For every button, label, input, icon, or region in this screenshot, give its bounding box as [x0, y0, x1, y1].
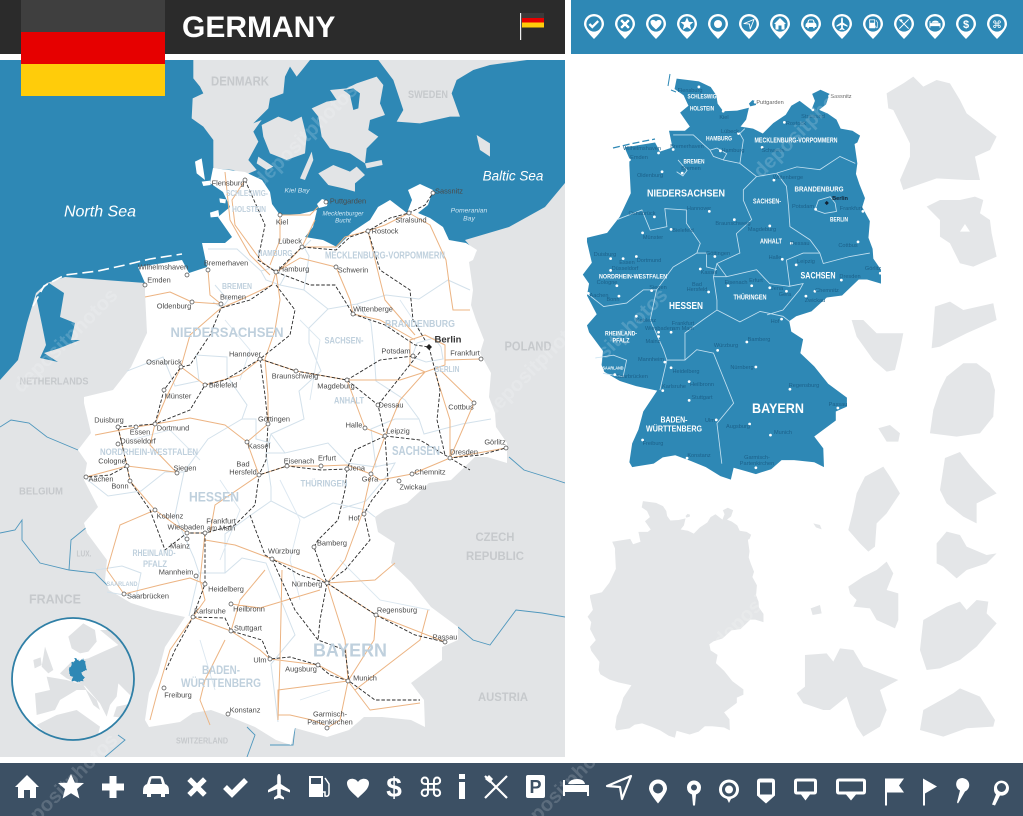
city labels: Karlsruhe [194, 606, 226, 616]
city names: Karlsruhe [662, 384, 686, 390]
federal state labels: SACHSEN- [324, 336, 364, 346]
road network [86, 172, 506, 728]
city labels: Flensburg [212, 178, 244, 188]
state names: BREMEN [684, 158, 705, 166]
city labels [88, 178, 506, 726]
city names: Mannheim [638, 357, 664, 363]
city labels: Leipzig [386, 426, 410, 436]
federal state labels: BRANDENBURG [385, 318, 455, 330]
neighbouring country labels: AUSTRIA [478, 692, 528, 704]
city names: Stralsund [801, 114, 825, 120]
city labels: Heidelberg [208, 584, 244, 594]
federal state labels: WÜRTTENBERG [181, 677, 261, 690]
city names: Stuttgart [691, 395, 713, 401]
city labels: Cottbus [448, 402, 474, 412]
federal state labels: SACHSEN [392, 444, 440, 458]
federal state labels: PFALZ [143, 559, 168, 569]
federal state labels: RHEINLAND- [132, 548, 176, 558]
railway network [86, 180, 506, 700]
state names: SCHLESWIG [688, 94, 716, 100]
city names: Munich [774, 430, 792, 436]
sea labels: Baltic Sea [483, 168, 544, 184]
gray state silhouettes, upper column [852, 77, 997, 442]
city names: Bremerhaven [670, 144, 704, 150]
neighbouring country labels: DENMARK [211, 74, 270, 88]
city names: Schwerin [761, 148, 785, 154]
neighbouring country labels: POLAND [504, 338, 552, 354]
neighbouring country labels: BELGIUM [19, 486, 63, 498]
city labels: Dessau [378, 400, 404, 410]
city names: Oldenburg [637, 173, 663, 179]
map pin icon row: $ [963, 19, 969, 31]
city names: Partenkirchen [740, 461, 774, 467]
city names: Ulm [705, 418, 715, 424]
city names: Hannover [687, 206, 711, 212]
city labels: Emden [147, 276, 171, 284]
city names: Siegen [649, 285, 667, 291]
blue administrative map of Germany [583, 74, 882, 480]
city labels: Bremerhaven [204, 258, 248, 268]
city names: Essen [619, 260, 635, 266]
city labels: Zwickau [399, 482, 427, 492]
sea labels: Bay [463, 216, 475, 222]
state names: HAMBURG [706, 136, 732, 142]
city names: Leipzig [797, 259, 815, 265]
city labels: Potsdam [381, 346, 411, 356]
stock watermarks: depositphotos [709, 539, 822, 652]
city labels: Mannheim [159, 568, 193, 576]
city labels: Regensburg [377, 606, 417, 614]
state names: HESSEN [669, 300, 703, 312]
bottom icon row: ⌘ [418, 773, 444, 804]
federal state labels: BREMEN [222, 281, 252, 291]
city labels: Münster [165, 392, 192, 400]
city names: Hamburg [721, 148, 745, 154]
city names: Kiel [719, 115, 729, 121]
city labels: Würzburg [268, 546, 300, 556]
city names: Cottbus [838, 243, 858, 249]
city names: Bielefeld [672, 228, 694, 234]
stock watermarks: depositphotos [559, 284, 672, 397]
city names: Augsburg [726, 424, 750, 430]
city labels: Oldenburg [157, 302, 191, 310]
city names: Wittenberge [773, 175, 803, 181]
city names: Saarbrücken [616, 374, 648, 380]
city names: Cologne [597, 280, 617, 286]
city names: Jena [771, 286, 784, 292]
small flag icon [520, 13, 544, 40]
city names: Osnabrück [628, 211, 656, 217]
city names [590, 88, 881, 467]
city labels: Berlin [435, 334, 462, 346]
state names [599, 94, 848, 434]
city labels: Jena [349, 464, 366, 472]
city labels: Görlitz [484, 438, 506, 446]
gray Germany silhouette [588, 501, 763, 738]
federal state labels: THÜRINGEN [300, 478, 348, 490]
federal state labels: MECKLENBURG-VORPOMMERN [325, 250, 445, 262]
city labels: Lübeck [278, 236, 302, 246]
city names: Aachen [590, 293, 608, 299]
city names: Halle [769, 255, 781, 261]
city labels: Aachen [88, 474, 114, 484]
city labels: Koblenz [157, 512, 184, 520]
state names: BRANDENBURG [794, 184, 844, 194]
city names: Bonn [606, 297, 620, 303]
city names: Nürnberg [730, 365, 754, 371]
city names: Frankfurt [672, 321, 695, 327]
city names: Bamberg [748, 337, 770, 343]
city names: Emden [630, 155, 648, 161]
city labels: Munich [353, 674, 377, 682]
inset locator globe [12, 618, 140, 740]
city labels: Stuttgart [234, 624, 262, 632]
city names: Berlin [832, 196, 849, 202]
title: GERMANY [182, 11, 335, 44]
state names: NORDRHEIN-WESTFALEN [599, 274, 667, 280]
state names: ANHALT [760, 238, 783, 246]
state names: PFALZ [612, 338, 630, 344]
neighbouring country labels: LUX. [76, 550, 92, 558]
city labels: Augsburg [285, 664, 317, 674]
city labels: Heilbronn [233, 604, 265, 614]
inland lake: IJsselmeer [36, 283, 80, 362]
city labels: Kassel [248, 442, 270, 450]
city labels: Freiburg [164, 690, 192, 700]
city labels: Frankfurt [450, 348, 480, 358]
city names: Konstanz [687, 453, 711, 459]
sea labels: Mecklenburger [323, 210, 364, 218]
Germany silhouette with state borders and dots [583, 79, 882, 480]
neighbouring country labels: REPUBLIC [466, 551, 524, 563]
city labels: Bamberg [317, 538, 347, 548]
city labels: Düsseldorf [120, 436, 157, 446]
city labels: am Main [207, 524, 235, 532]
left map panel [0, 60, 565, 757]
federal state labels: SCHLESWIG- [226, 188, 268, 198]
city names: Gera [779, 292, 792, 298]
city labels: Chemnitz [414, 468, 446, 476]
bottom icon row: $ [386, 772, 402, 803]
city labels: Passau [433, 632, 457, 642]
sea [0, 60, 565, 380]
sea labels: Pomeranian [451, 208, 488, 214]
city labels: Braunschweig [272, 372, 318, 380]
city names: Bad [692, 282, 702, 288]
large German flag [21, 0, 165, 96]
city labels: Duisburg [94, 416, 124, 424]
city names: Kassel [701, 270, 717, 276]
federal state labels: SAARLAND [106, 582, 138, 588]
bottom icon row: P [529, 777, 542, 797]
city names: Flensburg [678, 88, 702, 94]
city names: Potsdam [792, 204, 814, 210]
federal state labels: BADEN- [202, 665, 240, 677]
city labels: Siegen [173, 464, 197, 472]
city labels: Saarbrücken [127, 592, 169, 600]
city labels: Schwerin [338, 266, 368, 274]
sea labels: Bucht [335, 218, 351, 224]
city labels: Osnabrück [146, 358, 182, 366]
federal state labels [100, 188, 460, 690]
city labels: Partenkirchen [307, 718, 353, 726]
map pin icon row [584, 14, 1007, 39]
federal state labels: HOLSTEIN [232, 204, 266, 214]
city names: Eisenach [724, 280, 748, 286]
city labels: Eisenach [284, 456, 314, 466]
city names: Rostock [786, 121, 806, 127]
city labels: Konstanz [230, 706, 261, 714]
city names: Mainz [646, 339, 661, 345]
city names: Zwickau [805, 298, 825, 304]
state names: WÜRTTENBERG [646, 424, 702, 434]
city labels: Mainz [170, 542, 190, 550]
city labels: Rostock [372, 226, 399, 236]
federal state labels: HAMBURG [258, 248, 293, 258]
city labels: Frankfurt [206, 516, 236, 526]
neighbouring country borders [0, 420, 565, 757]
city names: Garmisch- [744, 455, 770, 461]
state names: BADEN- [660, 416, 688, 424]
neighbouring country labels [19, 74, 552, 746]
city labels: Ulm [253, 656, 267, 664]
city labels: Cologne [98, 456, 126, 466]
city names: Braunschweig [715, 221, 751, 227]
city names: Göttingen [706, 251, 730, 257]
city names: Erfurt [749, 278, 763, 284]
city names: am Main [672, 326, 694, 332]
city labels: Puttgarden [330, 196, 366, 206]
capital marker: Berlin [426, 344, 432, 350]
city labels: Dortmund [157, 424, 189, 432]
federal state labels: NORDRHEIN-WESTFALEN [100, 447, 198, 457]
city names: Bremen [681, 166, 701, 172]
state names: SACHSEN- [753, 198, 782, 206]
city names: Magdeburg [748, 227, 776, 233]
city labels: Garmisch- [313, 710, 348, 718]
islands: Wadden chain [33, 254, 182, 306]
stock watermarks: depositphotos [249, 79, 362, 192]
city labels: Hannover [229, 350, 262, 358]
bottom icon bar [0, 763, 1023, 816]
city names: Sassnitz [830, 94, 852, 100]
city names: Münster [643, 235, 663, 241]
state names: SAARLAND [602, 366, 624, 372]
city labels: Bielefeld [209, 380, 237, 390]
city names: Frankfurt [840, 206, 863, 212]
state names: MECKLENBURG-VORPOMMERN [754, 138, 838, 144]
state names: BAYERN [752, 400, 804, 416]
north frisian islets [668, 74, 676, 92]
neighbouring country labels: CZECH [476, 532, 514, 544]
city names: Chemnitz [815, 288, 839, 294]
state names: NIEDERSACHSEN [647, 188, 725, 200]
state names: RHEINLAND- [605, 330, 637, 338]
sea labels: Kiel Bay [285, 188, 310, 194]
city labels: Bonn [111, 482, 129, 490]
city names: Würzburg [714, 343, 738, 349]
city names: Wilhelmshaven [623, 146, 661, 152]
neighbouring country labels: SWEDEN [408, 89, 448, 101]
city labels: Gera [362, 474, 379, 484]
city labels: Sassnitz [435, 186, 463, 196]
federal state labels: NIEDERSACHSEN [170, 324, 284, 340]
neighbouring country labels: FRANCE [29, 592, 81, 606]
state names: HOLSTEIN [690, 106, 714, 112]
city names: Dortmund [637, 258, 661, 264]
city names: Duisburg [594, 252, 616, 258]
city names: Passau [829, 402, 847, 408]
federal state labels: BERLIN [434, 364, 460, 374]
stock watermarks: depositphotos [479, 309, 592, 422]
city labels: Halle [346, 420, 362, 430]
city labels: Essen [130, 428, 150, 436]
city names: Hof [771, 319, 780, 325]
stock watermarks [9, 69, 862, 816]
city labels: Hof [348, 514, 361, 522]
map pin icon row: ⌘ [992, 20, 1002, 31]
city names: Koblenz [636, 318, 656, 324]
federal state labels: BAYERN [313, 640, 387, 660]
city labels: Göttingen [258, 414, 290, 424]
city labels: Wittenberge [353, 304, 393, 314]
city labels: Wiesbaden [168, 522, 204, 532]
city labels: Hamburg [279, 264, 309, 274]
city names: Puttgarden [756, 100, 784, 106]
land: Denmark and Sweden [192, 60, 527, 217]
city labels: Wilhelmshaven [138, 262, 188, 272]
bottom icon row [15, 772, 1009, 806]
federal state labels: HESSEN [189, 490, 239, 504]
neighbouring country labels: NETHERLANDS [20, 376, 89, 388]
city names: Lübeck [721, 129, 739, 135]
city labels: Dresden [450, 448, 478, 456]
city labels: Stralsund [395, 216, 427, 224]
rivers [130, 300, 430, 700]
city names: Regensburg [789, 383, 819, 389]
state names: THÜRINGEN [734, 292, 766, 302]
top title bar [0, 0, 565, 54]
city labels: Bremen [220, 292, 246, 302]
city names: Heidelberg [672, 369, 700, 375]
stock watermarks: depositphotos [9, 284, 122, 397]
sea labels: North Sea [64, 204, 136, 220]
city names: Dresden [839, 274, 861, 280]
city markers [84, 178, 508, 730]
state names: SACHSEN [800, 270, 836, 282]
city labels: Hersfeld [229, 468, 257, 476]
city labels: Bad [236, 460, 250, 468]
city labels: Magdeburg [317, 382, 355, 390]
city names: Hersfeld [687, 287, 707, 293]
city names: Freiburg [643, 441, 663, 447]
offshore islets [613, 139, 655, 148]
sea labels [64, 168, 544, 224]
top right icon bar [571, 0, 1023, 54]
neighbouring country labels: SWITZERLAND [176, 736, 228, 746]
federal state labels: ANHALT [334, 396, 364, 406]
state names: BERLIN [830, 216, 848, 224]
city labels: Kiel [276, 218, 289, 226]
city names: Görlitz [865, 266, 881, 272]
city labels: Erfurt [318, 454, 336, 462]
city names: Heilbronn [690, 382, 714, 388]
gray state silhouettes, lower group [797, 452, 997, 737]
federal state borders [84, 240, 491, 722]
Germany land [78, 168, 507, 745]
stock watermarks: depositphotos [749, 69, 862, 182]
city names: Wiesbaden [645, 326, 673, 332]
city names: Dessau [791, 241, 809, 247]
city labels: Nürnberg [292, 580, 322, 588]
city names: Düsseldorf [612, 266, 639, 272]
